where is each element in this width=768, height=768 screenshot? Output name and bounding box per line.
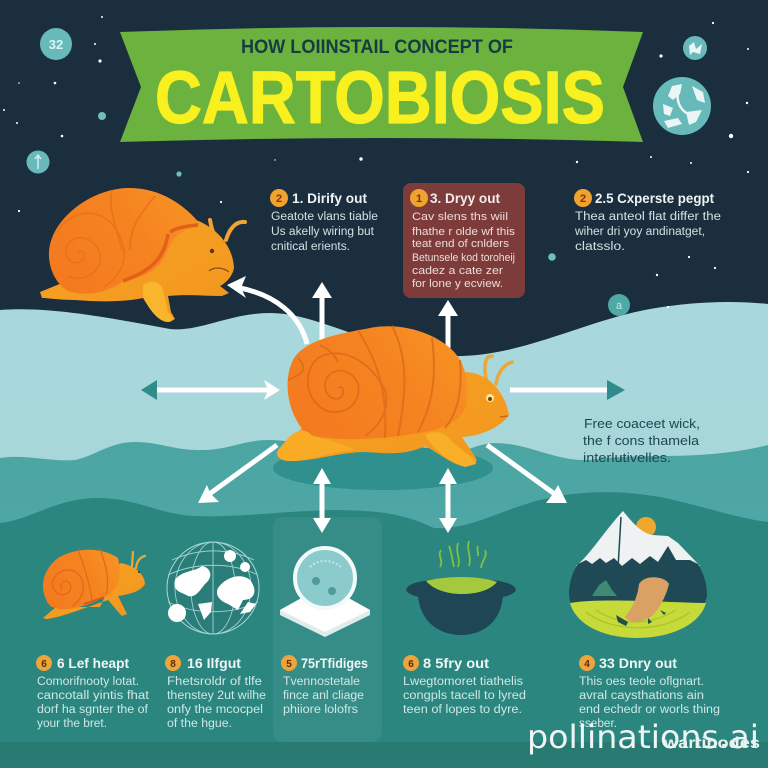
arrow: diagonal south west (198, 445, 277, 503)
panel: step 2.5 text: 2.5 Cxperste pegpt (595, 190, 714, 206)
panel: step 2.5 text: wiher dri yoy andinatget, (574, 226, 705, 238)
panel: central note text: interlutivelles. (583, 450, 671, 465)
panel: bottom text 1: Comorifnooty lotat. (37, 676, 139, 688)
panel: bottom text 1 (36, 655, 150, 730)
panel: bottom text 1: 6 (41, 659, 47, 670)
panel: bottom text 2 (165, 655, 266, 730)
panel: step 3 callout: teat end of cnlders (412, 238, 510, 250)
icon: letter bubble (608, 294, 630, 316)
panel: bottom text 5: sseber. (579, 718, 617, 730)
arrow: up right (438, 300, 458, 352)
panel: step 1 text: Us akelly wiring but (271, 226, 375, 238)
panel: bottom text 5: 4 (584, 659, 590, 670)
panel: bottom text 3 (281, 655, 368, 716)
icon: small bubble top right (683, 36, 707, 60)
panel: step 2.5 text: clatsslo. (575, 241, 625, 253)
illustration: central snail (277, 326, 512, 467)
panel: step 2.5 text (574, 189, 721, 253)
panel: bottom text 2: of the hgue. (167, 718, 232, 730)
icon: number bubble top left: 32 (49, 37, 63, 52)
panel: bottom text 5: This oes teole oflgnart. (579, 676, 704, 688)
panel: bottom text 3: 5 (286, 659, 292, 670)
arrow: double left (313, 468, 331, 533)
panel: bottom text 5 (579, 655, 720, 730)
icon: mountain scene (569, 511, 707, 638)
background wave: light (0, 302, 768, 768)
panel: bottom text 2: 16 Ilfgut (187, 655, 241, 671)
panel: step 1 text: cnitical erients. (271, 241, 350, 253)
illustration: top left snail (40, 188, 245, 322)
panel: step 3 callout: Betunsele kod toroheij (412, 252, 515, 264)
panel: step 3 callout: 1 (416, 193, 422, 205)
panel: bottom text 5: end echedr or worls thing (579, 704, 720, 716)
panel: bottom text 2: onfy the mcocpel (167, 704, 263, 716)
stars (3, 16, 749, 308)
panel: bottom text 1: your the bret. (37, 718, 107, 730)
background wave: dark teal (0, 492, 768, 768)
panel: step 1 text (270, 189, 378, 253)
panel: bottom text 2: 8 (170, 659, 176, 670)
panel: bottom text 2: Fhetsroldr of tlfe (167, 676, 262, 688)
panel: bottom text 3: Tvennostetale (283, 676, 360, 688)
panel: step 3 callout: for lone y ecview. (412, 278, 503, 290)
panel: central note text: the f cons thamela (583, 433, 700, 448)
watermark: wartinodes (663, 735, 760, 752)
panel: step 3 callout: cadez a cate zer (412, 265, 503, 277)
icon: small snail (43, 549, 145, 619)
panel: bottom text 4: congpls tacell to lyred (403, 690, 526, 702)
panel: bottom text 3: fince anl cliage (283, 690, 364, 702)
icon: globe (167, 542, 259, 634)
illustration: central shadow (273, 446, 493, 490)
panel: bottom text 4: teen of lopes to dyre. (403, 704, 522, 716)
panel: step 3 callout: Cav slens ths wiil (412, 211, 508, 223)
panel: step 1 text: 1. Dirify out (292, 190, 367, 206)
panel: bottom text 4: 8 5fry out (423, 655, 489, 671)
icon: number bubble top left (40, 28, 72, 60)
panel: step 3 callout (403, 183, 525, 298)
panel: bottom text 1: cancotall yintis fhat (37, 690, 150, 702)
bottom band (0, 742, 768, 768)
panel: step 3 callout: fhathe r olde wf this (412, 226, 516, 238)
panel: bottom text 3: 75rTfidiges (301, 655, 368, 671)
panel: bottom text 4: 6 (408, 659, 414, 670)
panel: central note text: Free coaceet wick, (584, 416, 700, 431)
panel: step 2.5 text: 2 (580, 193, 586, 205)
icon: letter bubble: a (616, 300, 623, 312)
background wave: mid teal (0, 440, 768, 768)
panel: step 3 callout: 3. Dryy out (430, 190, 500, 206)
panel: bottom text 2: thenstey 2ut wilhe (167, 690, 266, 702)
panel: highlight column (273, 517, 382, 742)
panel: step 1 text: 2 (276, 193, 282, 205)
arrow: up left (312, 282, 332, 345)
arrow: horizontal left (141, 380, 280, 400)
icon: cauldron (406, 541, 516, 635)
icon: petri dish on plate (280, 548, 370, 637)
panel: step 2.5 text: Thea anteol flat differ the (575, 211, 721, 223)
panel: central note text (583, 416, 700, 465)
icon: arrow bubble (26, 150, 50, 174)
arrow: double right (439, 468, 457, 533)
panel: bottom text 3: phiiore lolofrs (283, 704, 358, 716)
panel: bottom text 4: Lwegtomoret tiathelis (403, 676, 523, 688)
panel: bottom text 1: 6 Lef heapt (57, 655, 129, 671)
panel: bottom text 5: avral caysthations ain (579, 690, 704, 702)
title: small heading: HOW LOIINSTAIL CONCEPT OF (241, 37, 513, 58)
panel: bottom text 4 (403, 655, 526, 716)
panel: step 1 text: Geatote vlans tiable (271, 211, 378, 223)
arrow: curved to top snail (227, 276, 307, 344)
small teal dots (98, 112, 556, 261)
icon: large bubble with fragments (653, 77, 711, 135)
title: main heading: CARTOBIOSIS (155, 56, 605, 139)
title banner (120, 27, 643, 142)
arrow: diagonal south east (487, 445, 567, 503)
icon: steam (440, 541, 486, 568)
panel: bottom text 5: 33 Dnry out (599, 655, 677, 671)
watermark: pollinations.ai (527, 718, 759, 756)
panel: bottom text 1: dorf ha sgnter the of (37, 704, 149, 716)
arrow: horizontal right (510, 380, 625, 400)
